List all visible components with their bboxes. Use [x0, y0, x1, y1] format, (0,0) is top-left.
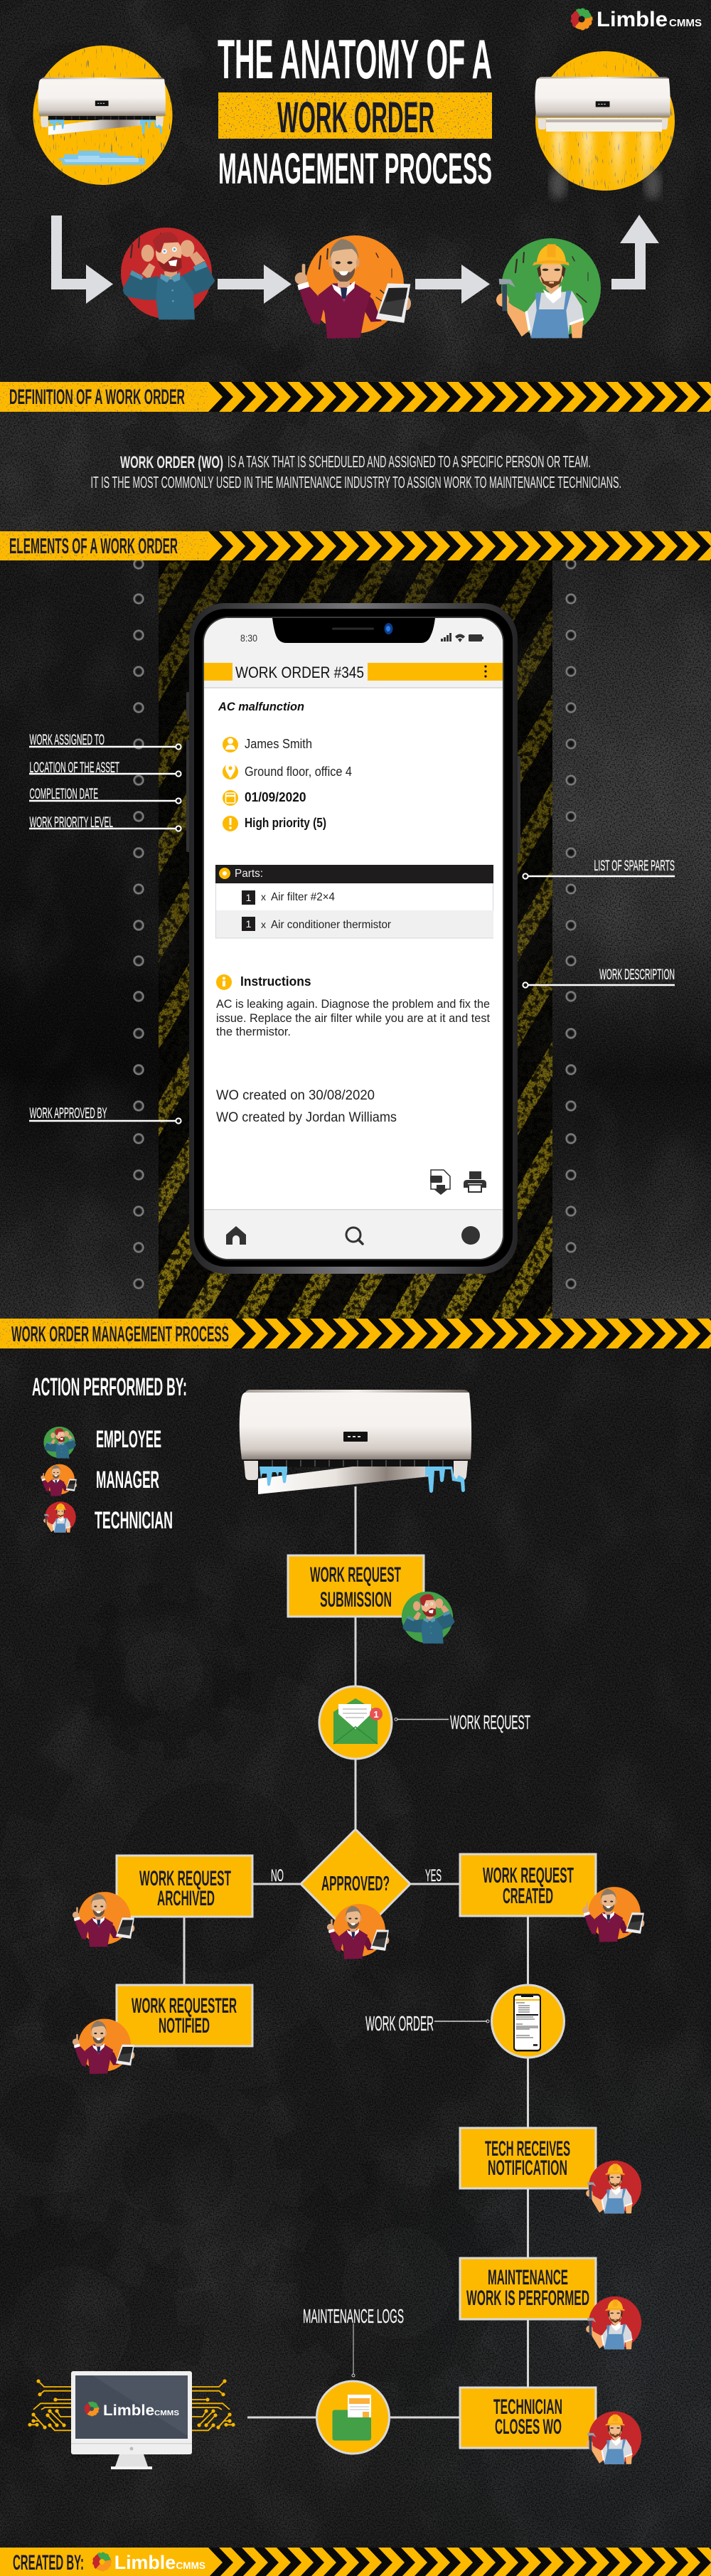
- icon: technician: [496, 238, 601, 338]
- flow decision: approved: [301, 1829, 410, 1939]
- flow box: work request archived: ARCHIVED: [157, 1887, 215, 1910]
- callout: work assigned to: WORK ASSIGNED TO: [30, 732, 105, 748]
- instructions: Instructions: [240, 974, 311, 989]
- work order header bar: [204, 663, 503, 681]
- logo on monitor: Limble: [103, 2402, 154, 2419]
- callout: location of the asset: LOCATION OF THE ASSET: [30, 760, 119, 776]
- location row: [223, 763, 352, 779]
- creation info: WO created by Jordan Williams: [216, 1110, 397, 1125]
- bottom navigation: [204, 1209, 503, 1260]
- instructions: issue. Replace the air filter while you are at it and test: [216, 1011, 490, 1025]
- arrow: manager to technician: [415, 265, 490, 304]
- title: [218, 40, 492, 183]
- flow box: work requester notified: NOTIFIED: [159, 2014, 210, 2038]
- callout: maintenance logs: [303, 2305, 404, 2377]
- icon: pdf download: [430, 1170, 450, 1195]
- callout: work description: [523, 967, 675, 988]
- parts table: 1: [246, 918, 252, 930]
- logo: Limble CMMS header: CMMS: [669, 17, 702, 29]
- legend item: manager: MANAGER: [96, 1467, 159, 1494]
- flow box: work requester notified: [117, 1985, 252, 2046]
- avatar: manager at created: [582, 1887, 644, 1942]
- arrow: employee to manager: [218, 265, 292, 304]
- parts table: Air filter #2×4: [271, 891, 335, 903]
- callout: work priority level: WORK PRIORITY LEVEL: [30, 814, 113, 831]
- flow node: maintenance logs folder: [317, 2381, 390, 2454]
- logo on monitor: [82, 2400, 179, 2419]
- date row: 01/09/2020: [245, 790, 306, 804]
- flow box: technician closes WO: TECHNICIAN: [493, 2395, 562, 2419]
- logo: Limble CMMS header: Limble: [597, 8, 668, 31]
- icon: manager: [295, 235, 411, 339]
- flow box: work request archived: WORK REQUEST: [139, 1867, 231, 1890]
- parts table: x: [261, 891, 266, 903]
- legend: action performed by: EMPLOYEE: [96, 1426, 161, 1453]
- arrow: L-shaped from frozen AC to employee: [51, 215, 113, 304]
- priority row: [223, 816, 326, 831]
- flow box: maintenance work is performed: MAINTENANCE: [488, 2266, 568, 2289]
- creation info: [216, 1088, 397, 1125]
- flow box: technician closes WO: [460, 2388, 596, 2448]
- icon: employee: [121, 228, 215, 319]
- legend: action performed by: ACTION PERFORMED BY:: [32, 1373, 187, 1401]
- logo: Limble CMMS footer: Limble: [114, 2552, 176, 2573]
- instructions: the thermistor.: [216, 1025, 291, 1038]
- connector lines: main flow: [184, 1486, 528, 2417]
- avatar: employee: [402, 1592, 455, 1644]
- circuit lines: [28, 2379, 71, 2430]
- banner: created by: CREATED BY:: [13, 2551, 84, 2575]
- text: WORK REQUEST: [450, 1711, 530, 1733]
- panel: elements of a work order backdrop: [0, 560, 711, 1319]
- flow box: work request submission: [288, 1555, 424, 1617]
- icon: working air conditioner: [535, 51, 675, 199]
- parts table: 1: [246, 892, 252, 903]
- flow box: maintenance work is performed: WORK IS PERFORMED: [466, 2287, 589, 2310]
- icon: printer: [464, 1171, 486, 1192]
- title: WORK ORDER: [277, 93, 434, 142]
- parts table: [215, 865, 493, 938]
- banner: work order management process: [0, 1319, 711, 1348]
- legend item: technician: TECHNICIAN: [95, 1507, 173, 1534]
- label: no: NO: [271, 1866, 284, 1885]
- banner: created by: [0, 2548, 711, 2576]
- flow box: work request created: CREATED: [503, 1883, 553, 1908]
- work title: AC malfunction: [218, 700, 304, 713]
- avatar: manager at archive: [73, 1892, 134, 1947]
- callout: work request: [395, 1711, 530, 1733]
- status bar: 8:30: [240, 633, 257, 644]
- flow box: work request submission: SUBMISSION: [320, 1588, 392, 1612]
- rivets: [133, 558, 577, 1289]
- banner: work order management process: WORK ORDER MANAGEMENT PROCESS: [11, 1321, 229, 1346]
- flow box: work request created: WORK REQUEST: [483, 1863, 574, 1888]
- text block: work order definition: [91, 452, 621, 491]
- callout: list of spare parts: [523, 858, 675, 879]
- flow node: work order phone: [492, 1985, 565, 2058]
- callout: work order: WORK ORDER: [365, 2013, 434, 2035]
- flow node: work request envelope: [319, 1686, 392, 1759]
- assignee row: James Smith: [245, 737, 312, 751]
- legend item: employee: [43, 1426, 161, 1459]
- parts table: Air conditioner thermistor: [271, 919, 392, 931]
- icon: frozen air conditioner: [33, 46, 173, 185]
- banner: elements of a work order: [0, 531, 711, 560]
- parts table: x: [261, 919, 266, 930]
- legend item: technician: [43, 1501, 173, 1534]
- work order header bar: WORK ORDER #345: [235, 664, 364, 681]
- callout: completion date: COMPLETION DATE: [30, 786, 98, 802]
- logo on monitor: CMMS: [154, 2409, 179, 2417]
- banner: definition of a work order: DEFINITION OF A WORK ORDER: [9, 385, 185, 409]
- flow box: tech receives notification: TECH RECEIVES: [485, 2137, 570, 2161]
- location row: Ground floor, office 4: [245, 765, 352, 779]
- flow box: tech receives notification: NOTIFICATION: [488, 2156, 567, 2180]
- logo: Limble CMMS footer: CMMS: [176, 2560, 205, 2571]
- parts table: Parts:: [235, 868, 263, 880]
- legend: action performed by: [32, 1373, 187, 1534]
- flow box: technician closes WO: CLOSES WO: [495, 2415, 562, 2439]
- phone mockup: [186, 603, 520, 1274]
- assignee row: [223, 737, 312, 752]
- text: MAINTENANCE LOGS: [303, 2305, 404, 2327]
- flow box: maintenance work is performed: [460, 2258, 596, 2319]
- text block: work order definition: WORK ORDER (WO): [120, 453, 223, 472]
- flow box: work request submission: WORK REQUEST: [310, 1563, 401, 1587]
- avatar: technician at maintenance: [586, 2296, 641, 2349]
- flow node: work request envelope: 1: [373, 1709, 379, 1720]
- logo: Limble CMMS footer: [90, 2550, 205, 2574]
- flow decision: approved: APPROVED?: [321, 1873, 390, 1895]
- avatar: manager at decision: [327, 1904, 389, 1959]
- icon: frozen AC start: [240, 1390, 471, 1494]
- logo: Limble CMMS header: [567, 5, 702, 33]
- callout: work approved by: WORK APPROVED BY: [30, 1105, 107, 1122]
- banner: elements of a work order: ELEMENTS OF A WORK ORDER: [9, 533, 178, 558]
- text: YES: [425, 1866, 442, 1885]
- creation info: WO created on 30/08/2020: [216, 1088, 375, 1103]
- flow box: work request archived: [117, 1856, 252, 1917]
- notch: [272, 618, 435, 643]
- date row: [223, 790, 306, 806]
- flow box: tech receives notification: [460, 2128, 596, 2188]
- avatar: technician at notification: [586, 2161, 641, 2213]
- legend item: manager: [41, 1464, 159, 1496]
- avatar: manager at notified: [73, 2019, 134, 2074]
- instructions: AC is leaking again. Diagnose the problem and fix the: [216, 997, 490, 1011]
- banner: definition of a work order: [0, 382, 711, 412]
- instructions: [216, 974, 490, 1038]
- icon: CMMS monitor with circuits: [28, 2371, 235, 2469]
- flow box: work requester notified: WORK REQUESTER: [132, 1994, 237, 2018]
- status bar: [204, 618, 503, 688]
- flow box: work request created: [460, 1854, 596, 1916]
- arrow: technician to working AC: [611, 215, 659, 289]
- avatar: technician at close: [586, 2411, 641, 2464]
- priority row: High priority (5): [245, 816, 326, 830]
